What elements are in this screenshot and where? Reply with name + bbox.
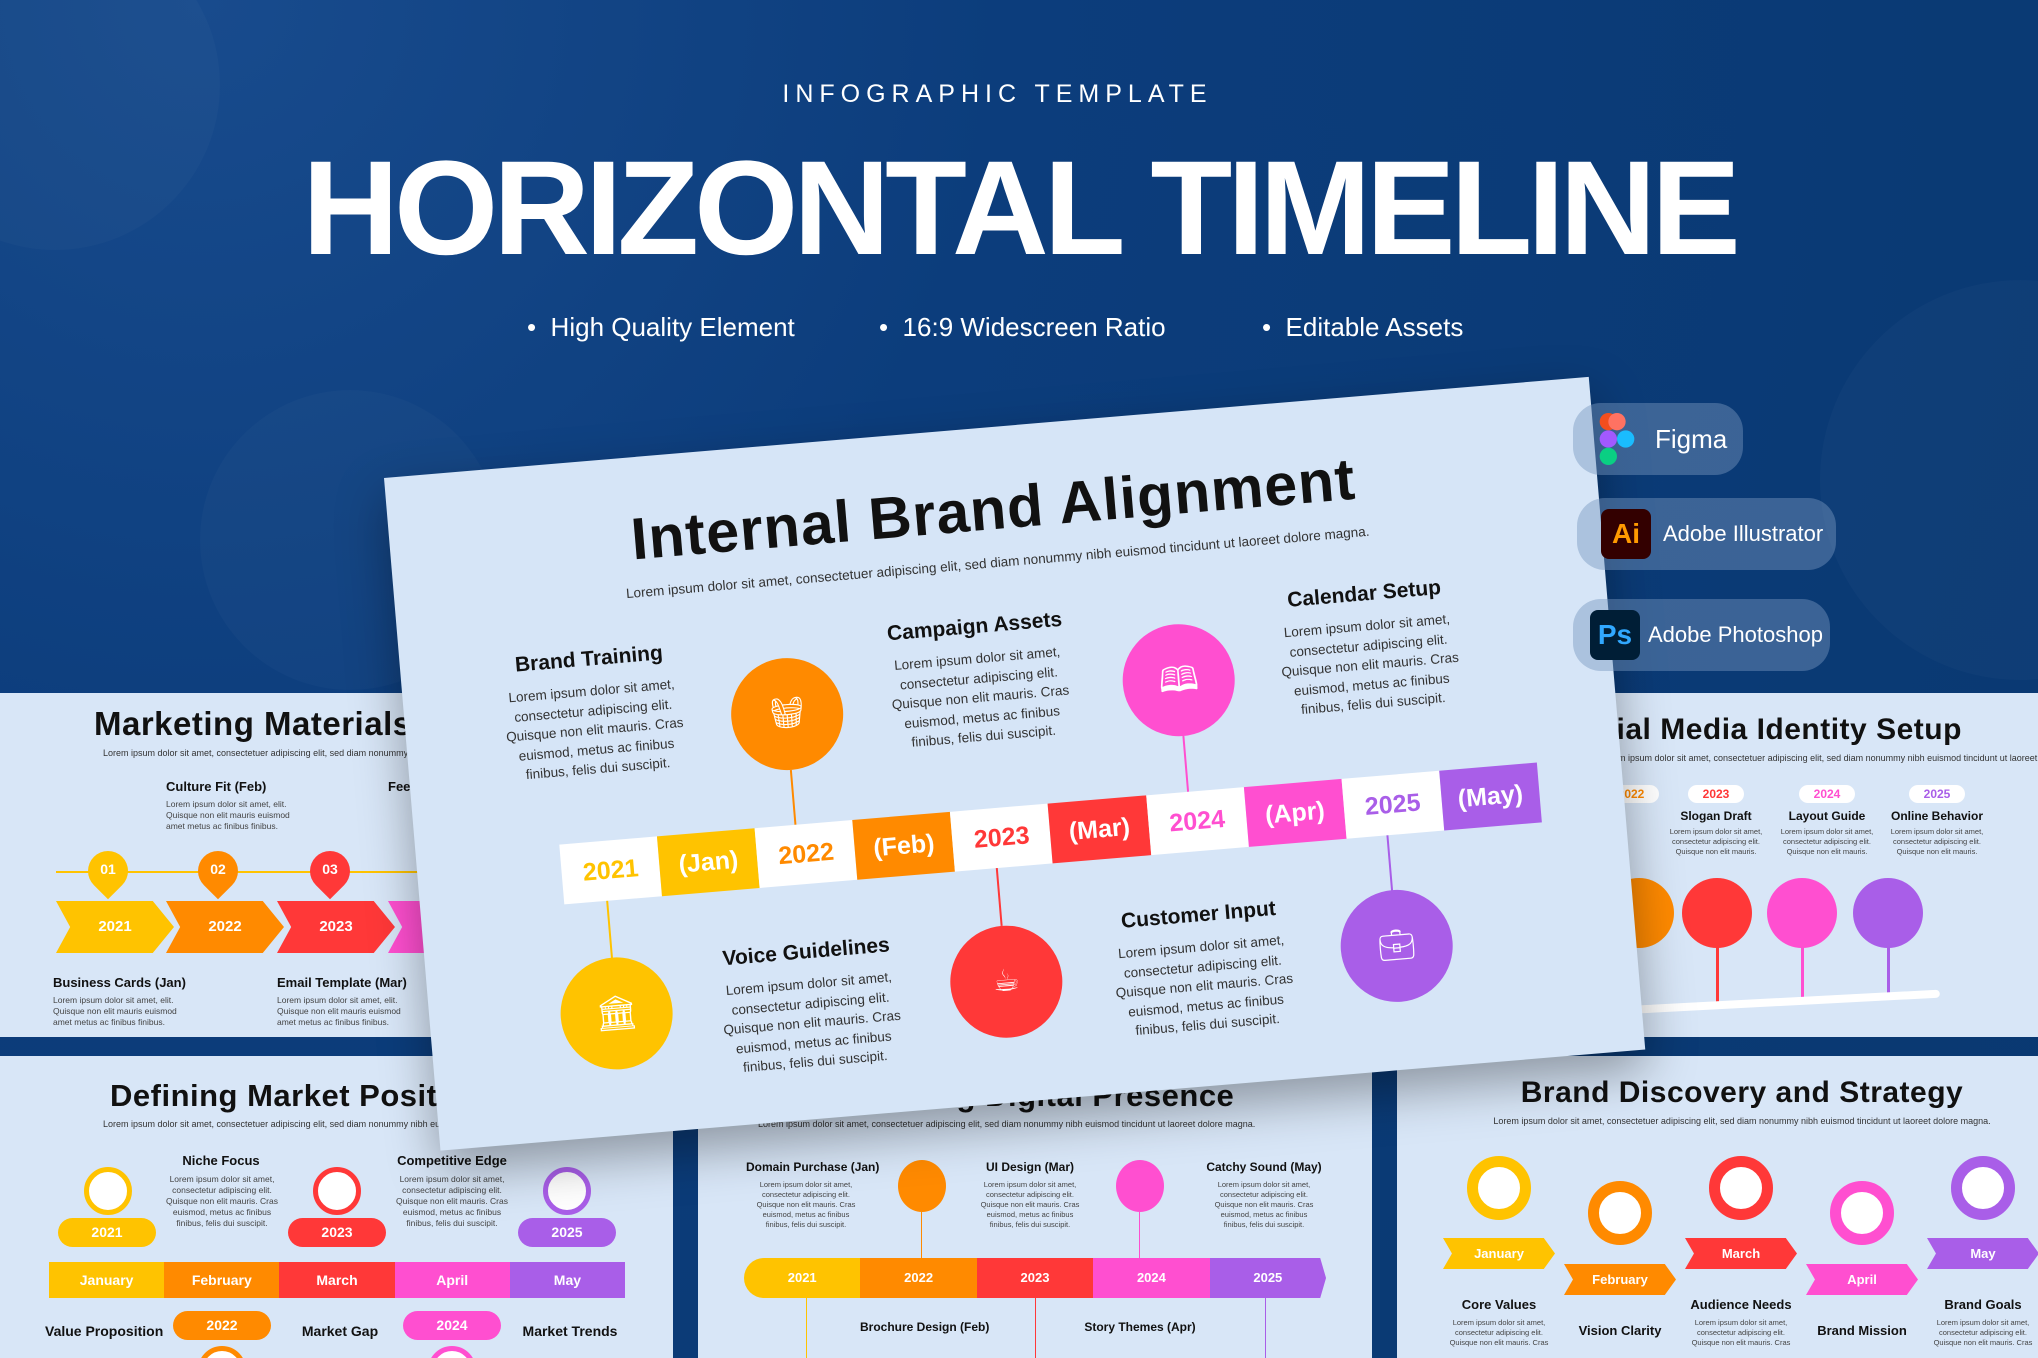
- panel: Digital Presence: Catchy Sound (May): [1206, 1160, 1322, 1174]
- icon: Ai logo: [1601, 509, 1651, 559]
- panel: Digital Presence: Lorem ipsum dolor sit amet, consectetur adipiscing elit. Quisque non elit mauris. Cras euismod, metus ac finibus finibus, felis dui suscipit.: [1215, 1180, 1313, 1229]
- panel: Marketing Materials: [0, 693, 431, 1037]
- panel: Defining Market Position: 2023: [321, 1224, 353, 1240]
- text: Voice Guidelines: Lorem ipsum dolor sit amet, consectetur adipiscing elit. Quisque non elit mauris. Cras euismod, metus ac finibus finibus, felis dui suscipit.: [723, 969, 901, 1075]
- panel: Brand Discovery and Strategy: Audience Needs: [1690, 1297, 1792, 1312]
- text: Campaign Assets: Campaign Assets: [886, 608, 1063, 645]
- panel: Brand Discovery and Strategy: Lorem ipsum dolor sit amet, consectetur adipiscing elit. Quisque non elit mauris. Cras: [1692, 1318, 1790, 1347]
- icon: book circle: [1118, 620, 1239, 741]
- icon: Ai logo: Ai: [1612, 518, 1640, 549]
- feature bullets: [527, 312, 1463, 342]
- badge: Figma: [1573, 403, 1743, 475]
- main title: HORIZONTAL TIMELINE: [302, 134, 1736, 283]
- badge: Adobe Illustrator: Adobe Illustrator: [1663, 521, 1823, 546]
- panel: Defining Market Position: 2025: [551, 1224, 583, 1240]
- panel: Brand Discovery and Strategy: March: [1722, 1246, 1760, 1261]
- panel: Brand Discovery and Strategy: April: [1847, 1272, 1877, 1287]
- panel: Defining Market Position: February: [192, 1272, 252, 1288]
- badge: Adobe Photoshop: [1573, 599, 1830, 671]
- panel: Brand Discovery and Strategy: Vision Clarity: [1579, 1323, 1661, 1338]
- panel: Defining Market Position: May: [554, 1272, 581, 1288]
- panel: Marketing Materials: Culture Fit (Feb): [166, 779, 266, 794]
- panel: Defining Market Position: 2022: [206, 1317, 238, 1333]
- panel: Media Identity Setup: Online Behavior: [1891, 809, 1983, 823]
- panel: Marketing Materials: 2021: [98, 918, 132, 935]
- panel: Marketing Materials: Lorem ipsum dolor sit amet, elit. Quisque non elit mauris euismod amet metus ac finibus finibus.: [53, 995, 177, 1027]
- text: Calendar Setup: Lorem ipsum dolor sit amet, consectetur adipiscing elit. Quisque non elit mauris. Cras euismod, metus ac finibus finibus, felis dui suscipit.: [1281, 611, 1459, 717]
- feature bullets: • 16:9 Widescreen Ratio: [879, 312, 1166, 342]
- connectors bottom: [606, 901, 613, 959]
- panel: Media Identity Setup: [1560, 693, 2038, 1037]
- badge: Adobe Photoshop: Adobe Photoshop: [1648, 622, 1823, 647]
- panel: Brand Discovery and Strategy: Brand Goals: [1944, 1297, 2022, 1312]
- panel: Brand Discovery and Strategy: [1397, 1056, 2038, 1358]
- panel: Defining Market Position: January: [80, 1272, 133, 1288]
- panel: Brand Discovery and Strategy: February: [1592, 1272, 1648, 1287]
- panel: Digital Presence: Story Themes (Apr): [1084, 1320, 1196, 1334]
- icon: bank circle: [556, 953, 677, 1074]
- timeline bar: [559, 762, 1542, 904]
- text: Campaign Assets: Lorem ipsum dolor sit amet, consectetur adipiscing elit. Quisque non elit mauris. Cras euismod, metus ac finibus finibus, felis dui suscipit.: [891, 644, 1070, 750]
- panel: Digital Presence: 2023: [1021, 1270, 1049, 1285]
- panel: Digital Presence: 2022: [904, 1270, 933, 1285]
- icon: briefcase circle: 💼︎: [1376, 927, 1417, 963]
- text: Brand Training: Brand Training: [514, 641, 664, 677]
- panel: Defining Market Position: Market Trends: [523, 1323, 617, 1339]
- panel: Marketing Materials: 2022: [208, 918, 242, 935]
- badge: Figma: Figma: [1655, 424, 1727, 454]
- panel: Brand Discovery and Strategy: Core Values: [1462, 1297, 1536, 1312]
- panel: Media Identity Setup: 2022: [1618, 787, 1644, 801]
- icon: Ps logo: [1590, 610, 1640, 660]
- panel: Marketing Materials: 01: [100, 861, 116, 877]
- panel: Digital Presence: Domain Purchase (Jan): [746, 1160, 879, 1174]
- panel: Brand Discovery and Strategy: Lorem ipsum dolor sit amet, consectetur adipiscing elit. Quisque non elit mauris. Cras: [1450, 1318, 1548, 1347]
- text: Customer Input: Customer Input: [1120, 897, 1277, 933]
- panel: Brand Discovery and Strategy: Brand Discovery and Strategy: [1521, 1076, 1963, 1109]
- timeline bar: (Mar): [1068, 813, 1131, 846]
- icon: book circle: 🕮︎: [1157, 660, 1200, 701]
- panel: Media Identity Setup: 2023: [1703, 787, 1729, 801]
- icon: briefcase circle: [1336, 885, 1457, 1006]
- timeline bar: 2022: [777, 838, 835, 870]
- panel: Digital Presence: 2024: [1137, 1270, 1166, 1285]
- text: Voice Guidelines: Voice Guidelines: [722, 933, 891, 970]
- panel: Brand Discovery and Strategy: Brand Mission: [1817, 1323, 1907, 1338]
- text: Calendar Setup: Calendar Setup: [1286, 576, 1442, 612]
- panel: Marketing Materials: Lorem ipsum dolor sit amet, elit. Quisque non elit mauris euismod amet metus ac finibus finibus.: [277, 995, 401, 1027]
- timeline bar: 2024: [1168, 805, 1226, 837]
- panel: Media Identity Setup: 2025: [1924, 787, 1950, 801]
- panel: Media Identity Setup: Layout Guide: [1789, 809, 1865, 823]
- featured subtitle: Lorem ipsum dolor sit amet, consectetuer adipiscing elit, sed diam nonummy nibh euismod tincidunt ut laoreet dolore magna.: [625, 524, 1370, 601]
- panel: Digital Presence: 2021: [788, 1270, 817, 1285]
- panel: Digital Presence: Lorem ipsum dolor sit amet, consectetur adipiscing elit. Quisque non elit mauris. Cras euismod, metus ac finibus finibus, felis dui suscipit.: [757, 1180, 855, 1229]
- panel: Marketing Materials: 2023: [319, 918, 353, 935]
- badge: Adobe Illustrator: [1577, 498, 1836, 570]
- panel: Marketing Materials: Feedback (Apr): [388, 779, 483, 794]
- panel: Digital Presence: 2025: [1253, 1270, 1282, 1285]
- connectors top: [790, 770, 796, 825]
- panel: Marketing Materials: Lorem ipsum dolor sit amet, elit. Quisque non elit mauris euismod amet metus ac finibus finibus.: [166, 799, 290, 831]
- panel: Marketing Materials: Lorem ipsum dolor sit amet, consectetuer adipiscing elit, sed diam nonummy nibh euismod tincidunt ut laoreet dolore magna.: [103, 748, 600, 758]
- icon: basket circle: [727, 654, 848, 775]
- timeline bar: 2021: [582, 854, 640, 887]
- panel: Media Identity Setup: Social Media Identity Setup: [1560, 713, 1962, 746]
- panel: Marketing Materials: 03: [322, 861, 338, 877]
- feature bullets: • Editable Assets: [1262, 312, 1463, 342]
- panel: Marketing Materials: Email Template (Mar): [277, 975, 407, 990]
- panel: Brand Discovery and Strategy: Lorem ipsum dolor sit amet, consectetur adipiscing elit. Quisque non elit mauris. Cras: [1934, 1318, 2032, 1347]
- icon: Ps logo: Ps: [1598, 619, 1632, 650]
- panel: Defining Market Position: April: [436, 1272, 468, 1288]
- panel: Media Identity Setup: Lorem ipsum dolor sit amet, consectetur adipiscing elit. Quisque non elit mauris.: [1781, 827, 1873, 856]
- panel: Digital Presence: Lorem ipsum dolor sit amet, consectetuer adipiscing elit, sed diam nonummy nibh euismod tincidunt ut laoreet dolore magna.: [758, 1119, 1255, 1129]
- text: Customer Input: Lorem ipsum dolor sit amet, consectetur adipiscing elit. Quisque non elit mauris. Cras euismod, metus ac finibus finibus, felis dui suscipit.: [1115, 932, 1294, 1038]
- feature bullets: • High Quality Element: [527, 312, 795, 342]
- panel: Media Identity Setup: 2024: [1814, 787, 1840, 801]
- panel: Brand Discovery and Strategy: May: [1970, 1246, 1996, 1261]
- panel: Brand Discovery and Strategy: Lorem ipsum dolor sit amet, consectetuer adipiscing elit, sed diam nonummy nibh euismod tincidunt ut laoreet dolore magna.: [1493, 1116, 1991, 1126]
- panel: Marketing Materials: Marketing Materials: [94, 705, 412, 742]
- timeline bar: (Apr): [1264, 797, 1326, 829]
- panel: Defining Market Position: March: [316, 1272, 358, 1288]
- panel: Defining Market Position: [0, 1056, 673, 1358]
- panel: Digital Presence: Lorem ipsum dolor sit amet, consectetur adipiscing elit. Quisque non elit mauris. Cras euismod, metus ac finibus finibus, felis dui suscipit.: [981, 1180, 1079, 1229]
- panel: Defining Market Position: Defining Market Position: [110, 1078, 485, 1113]
- icon: bowl circle: [946, 921, 1067, 1042]
- panel: Defining Market Position: Lorem ipsum dolor sit amet, consectetur adipiscing elit. Quisque non elit mauris. Cras euismod, metus ac finibus finibus, felis dui suscipit.: [166, 1174, 278, 1228]
- icon: bowl circle: ☕︎: [992, 964, 1021, 999]
- panel: Digital Presence: Brochure Design (Feb): [860, 1320, 989, 1334]
- panel: Defining Market Position: 2024: [436, 1317, 468, 1333]
- panel: Defining Market Position: Value Proposition: [45, 1323, 163, 1339]
- panel: Digital Presence: [698, 1056, 1372, 1358]
- timeline bar: 2025: [1364, 788, 1422, 821]
- icon: basket circle: 🧺︎: [767, 696, 807, 732]
- timeline bar: (Jan): [677, 846, 739, 879]
- panel: Media Identity Setup: Lorem ipsum dolor sit amet, consectetur adipiscing elit. Quisque non elit mauris.: [1670, 827, 1762, 856]
- timeline bar: (Feb): [872, 829, 936, 862]
- panel: Digital Presence: Building Digital Presence: [848, 1078, 1234, 1113]
- panel: Media Identity Setup: Slogan Draft: [1680, 809, 1752, 823]
- text: Brand Training: Lorem ipsum dolor sit amet, consectetur adipiscing elit. Quisque non elit mauris. Cras euismod, metus ac finibus finibus, felis dui suscipit.: [506, 676, 684, 782]
- panel: Digital Presence: UI Design (Mar): [986, 1160, 1074, 1174]
- panel: Defining Market Position: Market Gap: [302, 1323, 378, 1339]
- panel: Defining Market Position: 2021: [91, 1224, 123, 1240]
- timeline bar: (May): [1457, 780, 1524, 813]
- featured title: Internal Brand Alignment: [628, 446, 1358, 572]
- panel: Internal Brand Alignment (featured, tilted): [384, 377, 1645, 1151]
- panel: Marketing Materials: Business Cards (Jan): [53, 975, 186, 990]
- header label: INFOGRAPHIC TEMPLATE: [782, 80, 1213, 108]
- panel: Defining Market Position: Lorem ipsum dolor sit amet, consectetuer adipiscing elit, sed diam nonummy nibh euismod tincidunt ut laoreet dolore magna.: [103, 1119, 600, 1129]
- panel: Marketing Materials: 02: [210, 861, 226, 877]
- panel: Media Identity Setup: Lorem ipsum dolor sit amet, consectetur adipiscing elit. Quisque non elit mauris.: [1891, 827, 1983, 856]
- timeline bar: 2023: [973, 821, 1031, 854]
- panel: Defining Market Position: Competitive Edge: [397, 1153, 507, 1168]
- panel: Brand Discovery and Strategy: January: [1474, 1246, 1524, 1261]
- icon: bank circle: 🏛︎: [594, 993, 640, 1034]
- panel: Defining Market Position: Lorem ipsum dolor sit amet, consectetur adipiscing elit. Quisque non elit mauris. Cras euismod, metus ac finibus finibus, felis dui suscipit.: [396, 1174, 508, 1228]
- icon: figma logo: [1600, 413, 1634, 465]
- panel: Defining Market Position: Niche Focus: [182, 1153, 260, 1168]
